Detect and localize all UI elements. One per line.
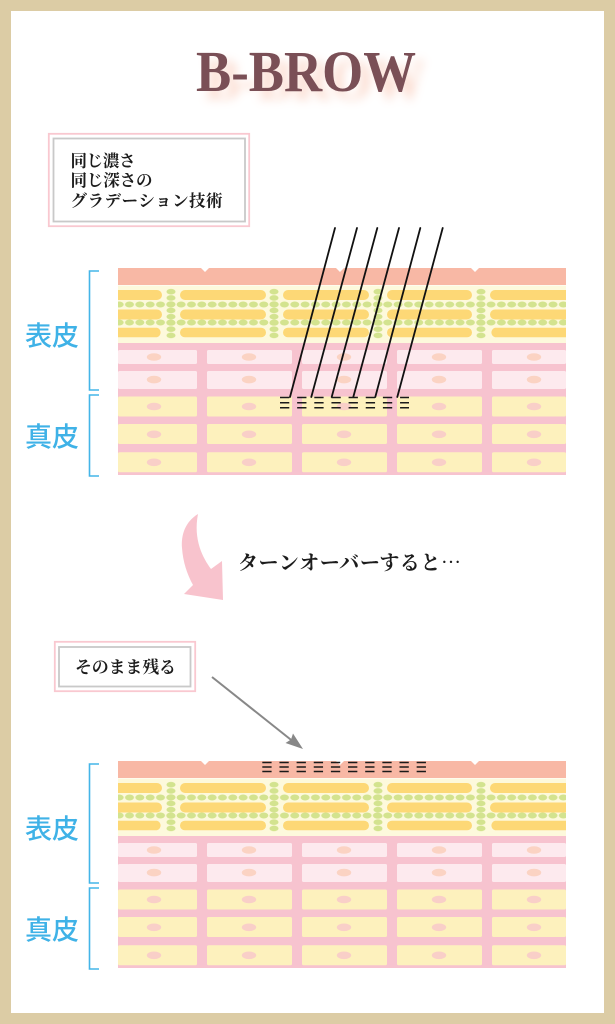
title: B-BROW <box>196 39 416 104</box>
bracket: dermis lower <box>90 888 99 969</box>
dermis cells <box>118 396 566 472</box>
callout: same density, same depth: グラデーション技術 <box>70 190 223 210</box>
granular fat cell layer <box>118 778 566 836</box>
pigment marks in dermis <box>280 398 409 408</box>
callout: remains as is <box>55 642 195 691</box>
label: dermis: 真皮 <box>25 422 79 452</box>
pigment marks in surface layer <box>262 762 426 772</box>
skin diagram: after turnover <box>118 760 566 968</box>
callout: remains as is: そのまま残る <box>75 657 176 677</box>
epidermis cells <box>118 350 566 389</box>
callout: same density, same depth: 同じ深さの <box>70 171 152 190</box>
callout: same density, same depth <box>49 134 249 226</box>
needle lines into skin <box>290 228 443 397</box>
label: epidermis lower: 表皮 <box>25 814 79 844</box>
bracket: epidermis <box>90 271 99 390</box>
label: dermis lower: 真皮 <box>25 916 79 946</box>
callout: same density, same depth: 同じ濃さ <box>70 150 136 170</box>
granular fat cell layer <box>118 286 566 343</box>
dermis cells <box>118 890 566 965</box>
curved pink arrow <box>182 514 223 600</box>
turnover text: ターンオーバーすると… <box>238 546 461 576</box>
stratum corneum layer <box>118 267 566 285</box>
pink dermis background <box>118 836 566 968</box>
stratum corneum layer <box>118 760 566 778</box>
epidermis cells <box>118 843 566 882</box>
grey pointer arrow <box>212 677 303 749</box>
skin diagram: before turnover <box>118 267 566 475</box>
label: epidermis: 表皮 <box>25 322 79 352</box>
pink dermis background <box>118 342 566 475</box>
bracket: epidermis lower <box>90 764 99 883</box>
bracket: dermis <box>90 395 99 476</box>
